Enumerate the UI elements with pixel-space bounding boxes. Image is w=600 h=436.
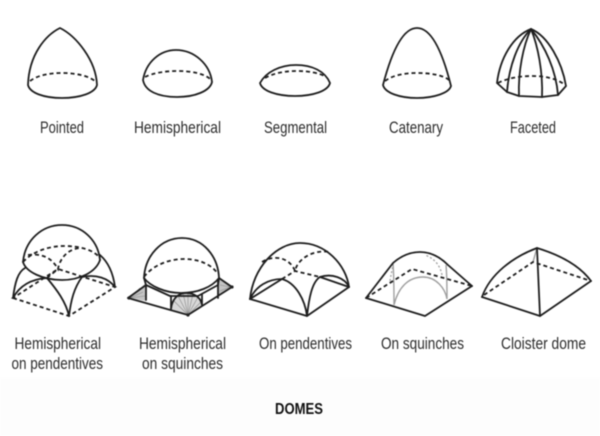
dome: on pendentives [250, 243, 349, 316]
dome: cloister dome [482, 248, 591, 316]
label: hemispherical on pendentives [12, 335, 103, 373]
label: segmental: Segmental [264, 119, 327, 137]
title: DOMES [275, 401, 323, 418]
label: on pendentives: On pendentives [259, 335, 352, 353]
dome: hemispherical [143, 50, 212, 97]
icon: squinch fans [128, 277, 232, 315]
label: faceted: Faceted [510, 119, 556, 137]
dome: pointed [28, 28, 97, 98]
dome: catenary [383, 28, 451, 98]
dome: hemispherical on squinches [127, 238, 234, 317]
label: pointed: Pointed [40, 119, 84, 137]
label: hemispherical on squinches [139, 335, 226, 373]
dome: segmental [260, 65, 330, 96]
label: hemispherical on squinches: Hemispherical [139, 335, 226, 353]
label: hemispherical: Hemispherical [134, 119, 221, 137]
dome: faceted [497, 29, 566, 97]
label: hemispherical on squinches: on squinches [142, 355, 223, 373]
label: hemispherical on pendentives: on pendentives [12, 355, 103, 373]
label: cloister dome: Cloister dome [501, 335, 586, 353]
label: on squinches: On squinches [381, 335, 464, 353]
dome: on squinches [366, 252, 472, 316]
label: hemispherical on pendentives: Hemispherical [14, 335, 101, 353]
label: catenary: Catenary [389, 119, 444, 137]
dome: hemispherical on pendentives [13, 225, 115, 316]
